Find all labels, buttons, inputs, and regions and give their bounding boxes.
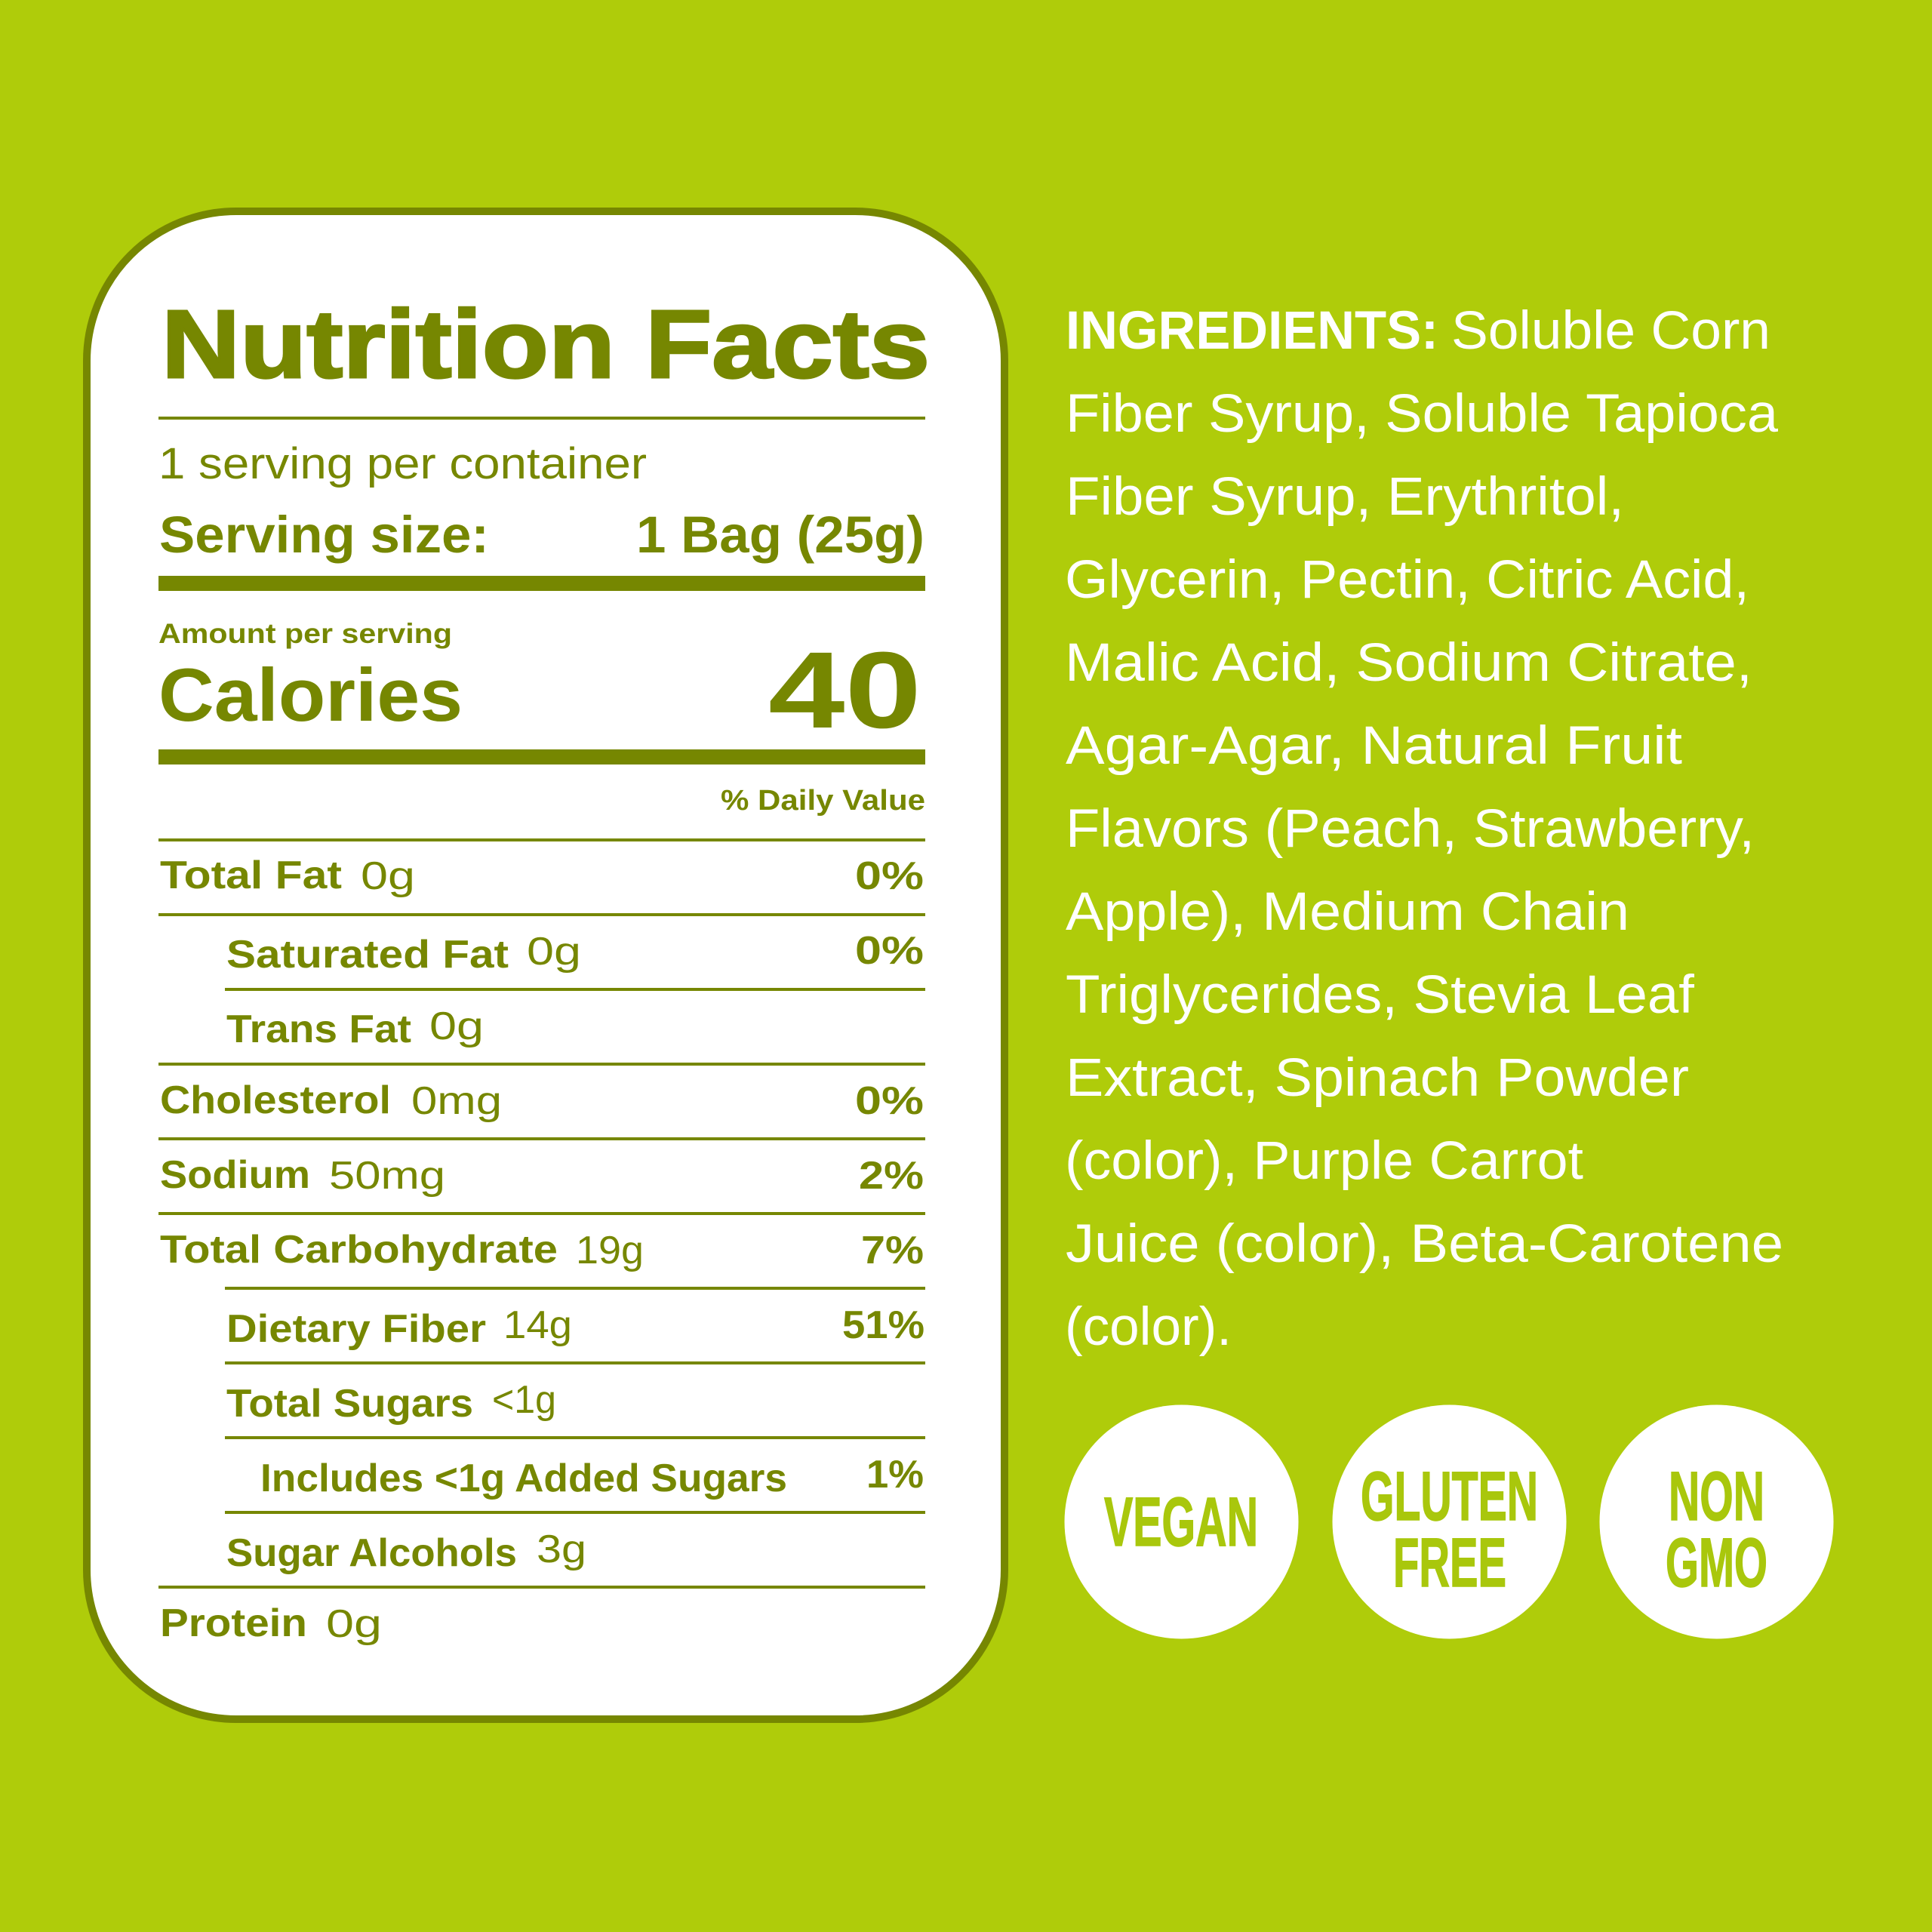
row: trans fat bbox=[226, 1004, 484, 1051]
text block: ingredients: Fiber Syrup, Erythritol, bbox=[1066, 467, 1624, 527]
row: sodium: 2% bbox=[859, 1154, 924, 1198]
text block: ingredients: Juice (color), Beta-Carotene bbox=[1066, 1214, 1783, 1274]
ingredients line 1: INGREDIENTS: bbox=[1066, 301, 1438, 361]
row: saturated fat bbox=[226, 929, 924, 977]
text block: ingredients: Apple), Medium Chain bbox=[1066, 882, 1629, 942]
row: trans fat: 0g bbox=[429, 1004, 484, 1048]
ingredients line 1: Soluble Corn bbox=[1451, 301, 1770, 361]
row: sodium: Sodium bbox=[160, 1153, 310, 1197]
serving size label: Serving size: bbox=[159, 506, 489, 564]
row: protein: 0g bbox=[326, 1602, 382, 1646]
row: saturated fat: 0g bbox=[527, 930, 581, 974]
row: protein: Protein bbox=[160, 1601, 307, 1645]
row: sugar alcohols: 3g bbox=[537, 1527, 586, 1571]
text block: ingredients: Extract, Spinach Powder bbox=[1066, 1048, 1689, 1108]
row: added sugars: 1% bbox=[866, 1453, 924, 1497]
text block: ingredients bbox=[1065, 301, 1783, 1357]
calories label: Calories bbox=[158, 653, 463, 737]
row: total carbohydrate: 7% bbox=[861, 1229, 924, 1272]
row: total sugars: Total Sugars bbox=[226, 1382, 473, 1426]
text block: ingredients: Agar-Agar, Natural Fruit bbox=[1066, 716, 1682, 776]
calories value: 40 bbox=[768, 629, 921, 751]
calories row bbox=[158, 629, 921, 751]
row: trans fat: Trans Fat bbox=[226, 1008, 411, 1051]
text block: ingredients: (color), Purple Carrot bbox=[1065, 1131, 1583, 1191]
row: added sugars: Includes <1g Added Sugars bbox=[260, 1457, 787, 1500]
row: dietary fiber: Dietary Fiber bbox=[226, 1307, 486, 1351]
badge: non gmo: GMO bbox=[1666, 1524, 1767, 1601]
text block: ingredients: Triglycerides, Stevia Leaf bbox=[1066, 965, 1694, 1025]
text block: ingredients: Fiber Syrup, Soluble Tapioca bbox=[1066, 384, 1779, 444]
badge: vegan bbox=[1064, 1405, 1298, 1639]
row: cholesterol: Cholesterol bbox=[160, 1078, 391, 1122]
row: dietary fiber bbox=[226, 1303, 924, 1351]
title: Nutrition Facts bbox=[162, 291, 930, 398]
row: total carbohydrate: Total Carbohydrate bbox=[160, 1228, 558, 1272]
row: total fat: 0g bbox=[361, 854, 415, 898]
badge: non gmo bbox=[1600, 1405, 1834, 1639]
row: total fat: 0% bbox=[855, 854, 924, 898]
badge: gluten free: GLUTEN bbox=[1361, 1458, 1538, 1535]
row: sugar alcohols: Sugar Alcohols bbox=[226, 1531, 517, 1575]
row: cholesterol bbox=[160, 1078, 924, 1123]
row: cholesterol: 0mg bbox=[411, 1079, 502, 1123]
row: saturated fat: 0% bbox=[855, 929, 924, 973]
row: sodium: 50mg bbox=[329, 1154, 445, 1198]
card outline bbox=[87, 211, 1004, 1719]
row: saturated fat: Saturated Fat bbox=[226, 933, 509, 977]
row: sodium bbox=[160, 1153, 924, 1198]
row: total carbohydrate bbox=[160, 1228, 924, 1272]
row: total sugars bbox=[226, 1378, 556, 1426]
daily value header: % Daily Value bbox=[721, 785, 925, 817]
row: total sugars: <1g bbox=[492, 1378, 556, 1422]
badge: gluten free: FREE bbox=[1393, 1524, 1506, 1601]
row: dietary fiber: 14g bbox=[503, 1303, 572, 1347]
panel: nutrition facts bbox=[87, 211, 1004, 1719]
ingredients line 1 bbox=[1066, 301, 1770, 361]
servings per container: 1 serving per container bbox=[158, 439, 647, 488]
row: protein bbox=[160, 1601, 382, 1646]
badge: vegan: VEGAN bbox=[1104, 1484, 1258, 1561]
row: total fat bbox=[160, 854, 924, 898]
row: total fat: Total Fat bbox=[160, 854, 342, 897]
badge: gluten free bbox=[1333, 1405, 1567, 1639]
badge: non gmo: NON bbox=[1669, 1458, 1764, 1535]
serving size row bbox=[159, 506, 924, 564]
serving size value: 1 Bag (25g) bbox=[636, 506, 924, 564]
text block: ingredients: Malic Acid, Sodium Citrate, bbox=[1065, 633, 1752, 693]
text block: ingredients: Glycerin, Pectin, Citric Acid, bbox=[1065, 550, 1749, 610]
row: total carbohydrate: 19g bbox=[576, 1229, 644, 1272]
text block: ingredients: Flavors (Peach, Strawberry, bbox=[1066, 799, 1755, 859]
row: dietary fiber: 51% bbox=[842, 1303, 924, 1347]
text block: ingredients: (color). bbox=[1065, 1297, 1232, 1357]
row: cholesterol: 0% bbox=[855, 1079, 924, 1123]
amount per serving: Amount per serving bbox=[158, 618, 452, 649]
